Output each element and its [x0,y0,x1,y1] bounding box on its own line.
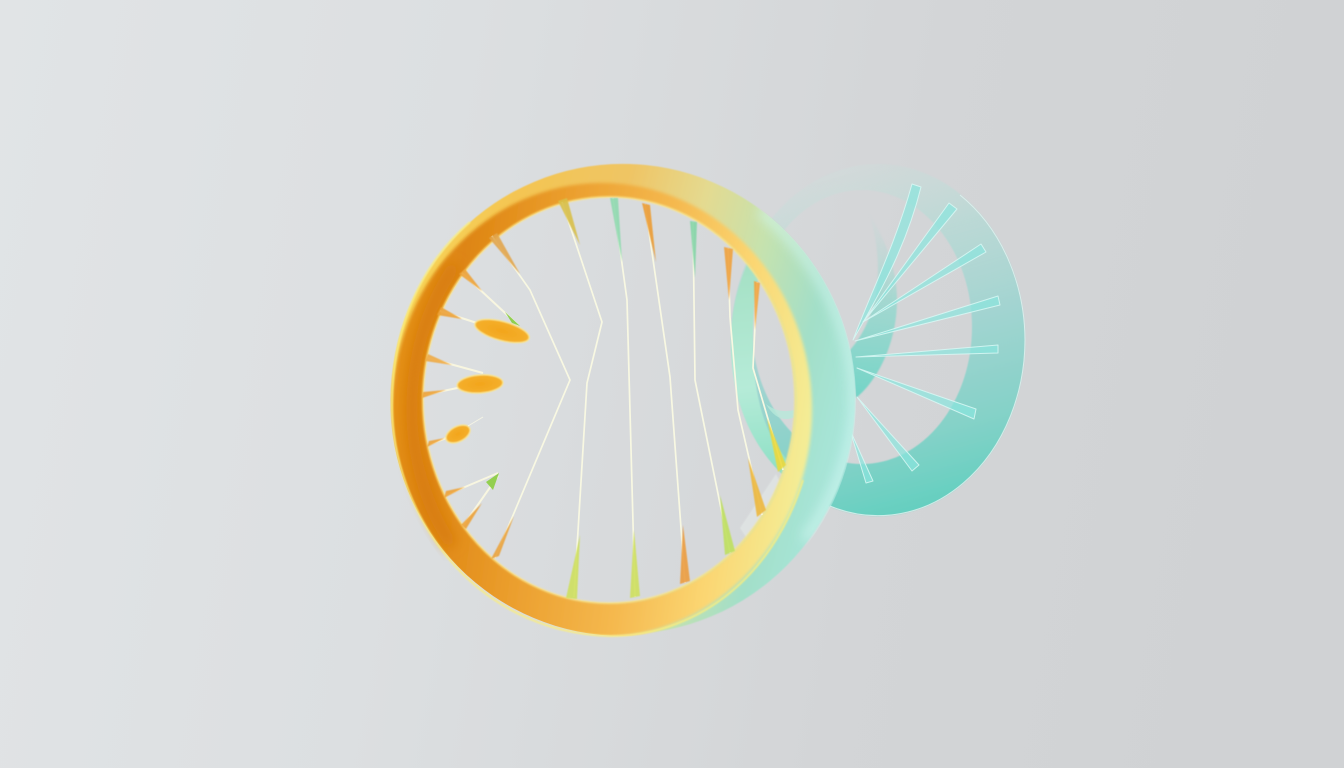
front ring face [392,183,812,637]
capsule 3 [443,421,473,447]
spoke 6 [857,368,976,419]
green tips [505,312,520,326]
spoke roots [422,269,482,529]
body glow on right edge [760,210,855,540]
spoke 5 [856,345,998,357]
ring highlight edge [830,195,1025,516]
front rungs [489,198,786,599]
left mint band [731,262,790,474]
rung roots [489,198,786,599]
bright inner rim [423,197,795,603]
back ring band [731,164,1025,516]
spoke lines [424,273,518,526]
spoke 4 [855,296,1000,341]
back teal ring [731,164,1025,540]
illustration: DNA-like rings [0,0,1026,768]
rung lines [492,198,783,597]
spoke 1 [853,184,921,340]
spoke 3 [863,244,986,322]
spoke 7 [857,397,919,471]
short spokes with capsules [422,269,532,529]
bright outer rim [392,222,803,636]
spoke 8 [850,430,873,483]
teal spokes [850,184,1000,483]
capsule 2 [456,373,504,395]
dark left shading [412,265,455,545]
spoke 2 [863,203,957,322]
capsule 1 [472,315,532,347]
faint translucent patch [740,474,790,540]
lower mint sweep [766,404,795,419]
inner crescent [850,214,897,398]
capsule whisker [468,417,483,426]
front face band [392,183,812,637]
extruded ring body [391,164,855,634]
